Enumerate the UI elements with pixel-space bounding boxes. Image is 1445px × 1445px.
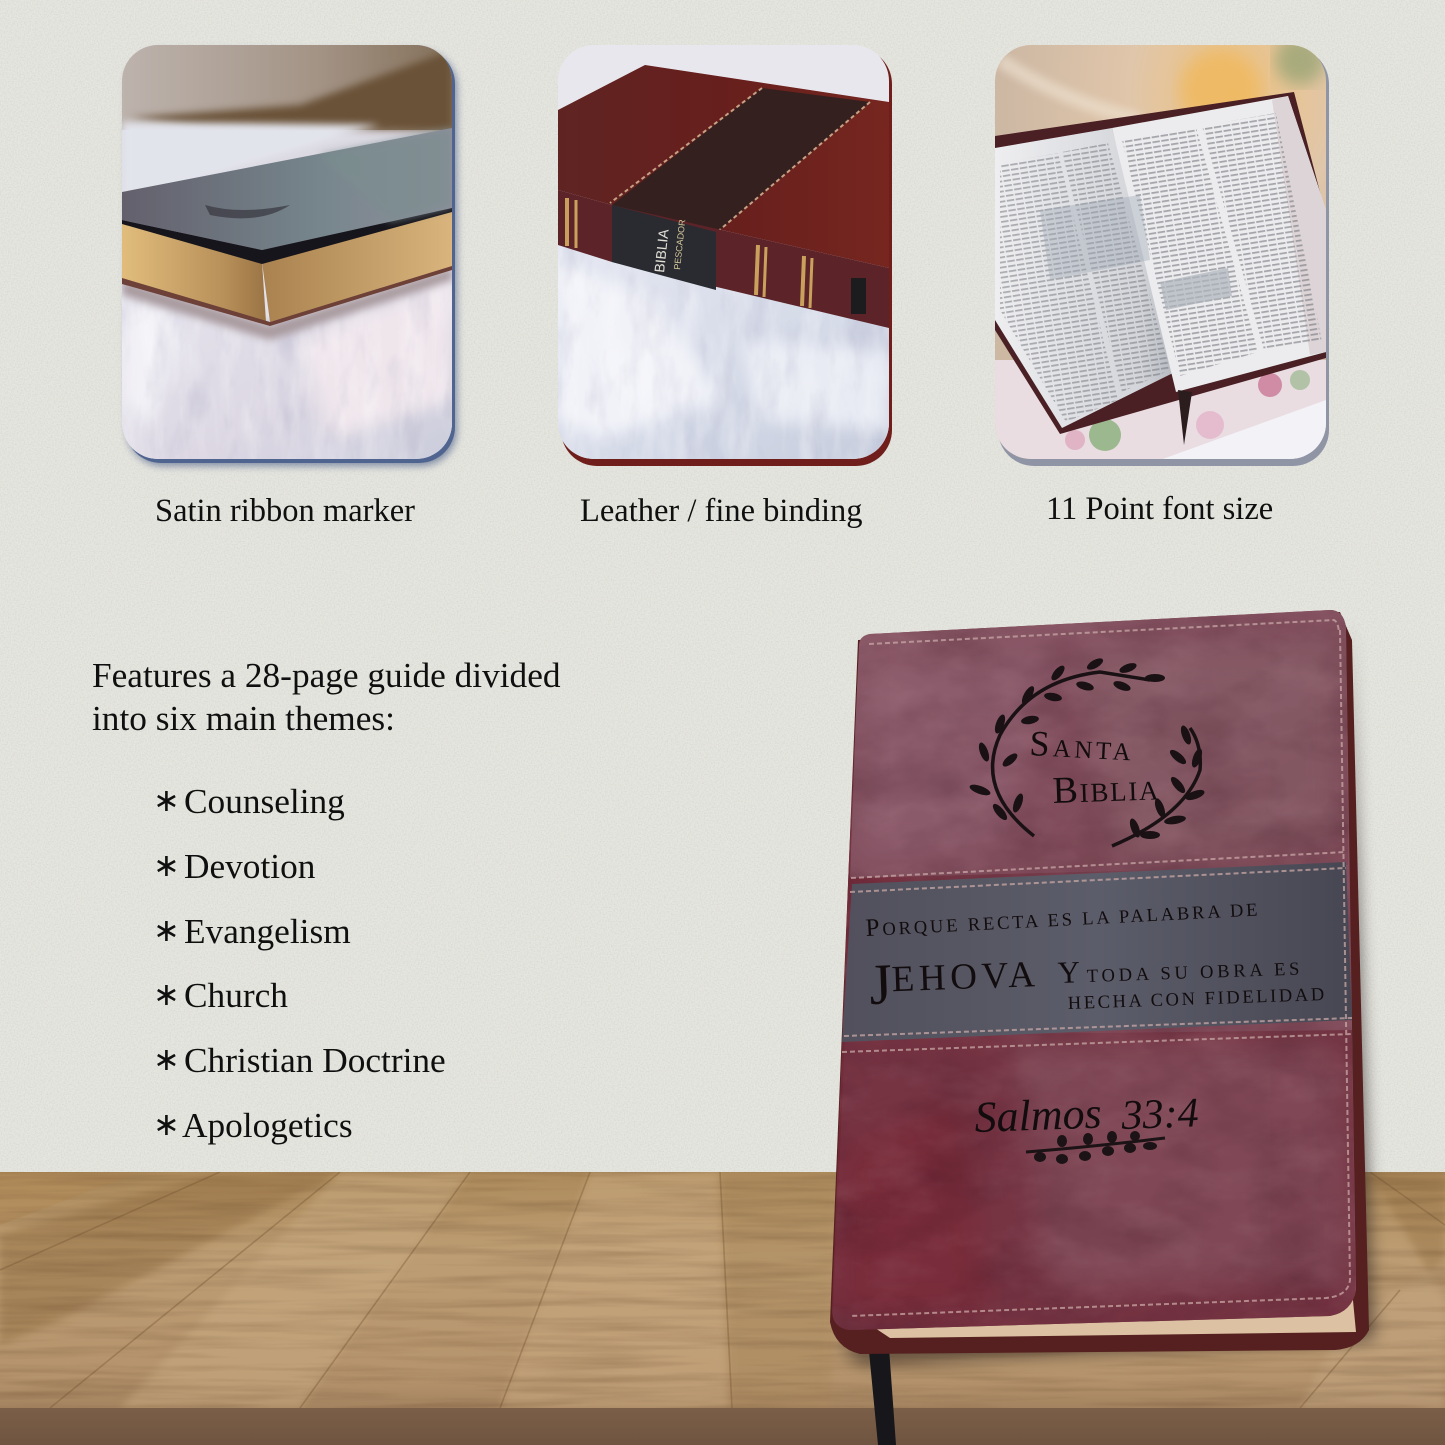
ribbon marker: [866, 1320, 896, 1445]
photo card: satin ribbon marker: [122, 45, 457, 466]
gray band: [842, 862, 1352, 1042]
theme list: Devotion: [184, 847, 316, 886]
cover verse: PORQUE RECTA ES LA PALABRA DE: [865, 894, 1261, 942]
cover verse: Y TODA SU OBRA ES: [1057, 946, 1304, 990]
book cover: [830, 605, 1360, 1335]
intro text: Features a 28-page guide divided: [92, 656, 561, 695]
theme list: Christian Doctrine: [184, 1041, 446, 1080]
cover reference: [974, 1089, 1199, 1164]
caption: satin ribbon marker: Satin ribbon marker: [155, 493, 415, 529]
book edge and pages: [830, 612, 1369, 1354]
cover verse: EHOVA: [891, 954, 1040, 1000]
caption: leather binding: Leather / fine binding: [580, 493, 862, 529]
theme list: ∗: [153, 1106, 180, 1142]
theme list: Apologetics: [182, 1106, 353, 1145]
theme list: Evangelism: [184, 912, 351, 951]
theme list: ∗: [153, 782, 180, 818]
cover title: [1029, 723, 1161, 812]
cover title: SANTA: [1029, 723, 1135, 768]
photo card: leather binding: PESCADOR: [672, 218, 687, 270]
theme list: Church: [184, 976, 288, 1015]
caption: font size: 11 Point font size: [1046, 491, 1273, 527]
photo card: 11 point font: [995, 35, 1329, 466]
bible book: [830, 605, 1374, 1445]
theme list: ∗: [153, 1041, 180, 1077]
theme list: ∗: [153, 847, 180, 883]
theme list: Counseling: [184, 782, 345, 821]
cover verse: J: [868, 951, 893, 1017]
theme list: [153, 782, 446, 1145]
intro text: into six main themes:: [92, 699, 395, 738]
wreath: [968, 656, 1206, 846]
cover verse: [865, 894, 1327, 1017]
book shadow: [840, 620, 1374, 1364]
photo card: leather binding: [558, 45, 892, 466]
theme list: ∗: [153, 912, 180, 948]
cover reference: Salmos: [974, 1089, 1102, 1142]
cover reference: 33:4: [1120, 1090, 1199, 1139]
theme list: ∗: [153, 976, 180, 1012]
cover verse: HECHA CON FIDELIDAD: [1067, 985, 1327, 1014]
photo card: leather binding: BIBLIA: [651, 228, 672, 273]
wood table: [0, 1172, 1445, 1445]
cover title: BIBLIA: [1052, 766, 1161, 812]
